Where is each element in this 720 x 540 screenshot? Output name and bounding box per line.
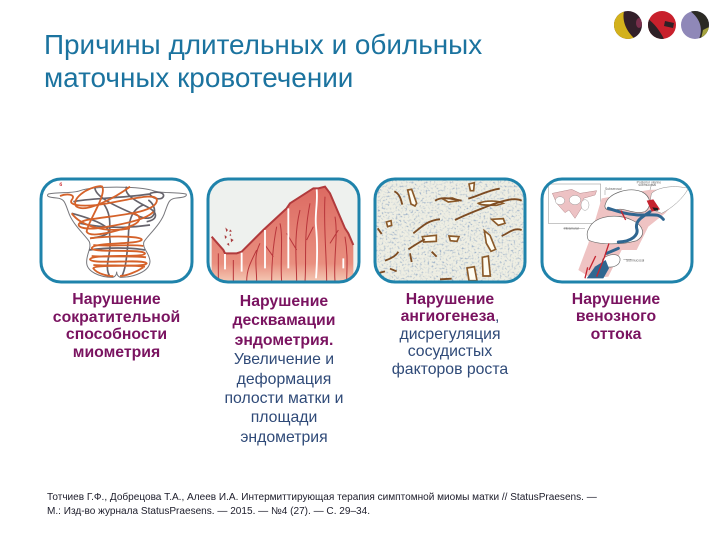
panel: venous outflow diagram: Intramural: [564, 226, 579, 230]
text block: venous outflow: Нарушение: [572, 291, 660, 308]
text block: venous outflow: венозного: [576, 308, 656, 325]
panel: venous outflow diagram: Submucosal: [626, 258, 645, 262]
citation: Тотчиев Г.Ф., Добрецова Т.А., Алеев И.А. Интермиттирующая терапия симптомной миомы матки // StatusPraesens. —: [47, 492, 597, 503]
text block: myometrium: сократительной: [53, 308, 180, 326]
text block: myometrium: [53, 291, 180, 360]
panel: endometrium desquamation illustration: [206, 178, 360, 284]
text block: desquamation: Нарушение: [240, 293, 328, 310]
text block: desquamation: полости матки и: [224, 390, 344, 407]
citation: М.: Изд-во журнала StatusPraesens. — 2015. — №4 (27). — С. 29–34.: [47, 506, 370, 516]
text block: myometrium: Нарушение: [72, 291, 161, 308]
text block: desquamation: Увеличение и: [234, 351, 334, 368]
text block: desquamation: [224, 293, 344, 446]
text block: myometrium: миометрия: [73, 344, 160, 360]
title: Причины длительных и обильных: [44, 29, 482, 60]
text block: angiogenesis: сосудистых: [408, 343, 492, 360]
panel: venous outflow diagram: Subserosal: [605, 187, 622, 191]
title: [44, 29, 482, 93]
text block: angiogenesis: ангиогенеза,: [401, 308, 499, 325]
text block: desquamation: площади: [251, 409, 317, 426]
text block: venous outflow: оттока: [591, 326, 641, 343]
text block: angiogenesis: [392, 291, 508, 378]
text block: desquamation: эндометрия: [240, 429, 328, 446]
panel: myometrium contractility diagram: б: [59, 181, 62, 187]
panel: venous outflow diagram: submucosal: [638, 183, 656, 187]
text block: desquamation: деформация: [237, 371, 331, 388]
text block: desquamation: десквамации: [232, 312, 335, 329]
text block: venous outflow: [572, 291, 660, 343]
text block: angiogenesis: факторов роста: [392, 361, 508, 378]
text block: angiogenesis: Нарушение: [406, 291, 494, 308]
text block: myometrium: способности: [66, 326, 167, 343]
panel: venous outflow diagram: [540, 178, 694, 284]
panel: angiogenesis micrograph: [374, 178, 526, 284]
panel: venous outflow diagram: Posterior uterine: [637, 180, 661, 184]
icon: three round portraits: [614, 11, 709, 39]
title: маточных кровотечении: [44, 62, 353, 93]
text block: desquamation: эндометрия.: [235, 332, 333, 349]
text block: angiogenesis: дисрегуляция: [399, 326, 501, 343]
citation: [47, 492, 597, 516]
